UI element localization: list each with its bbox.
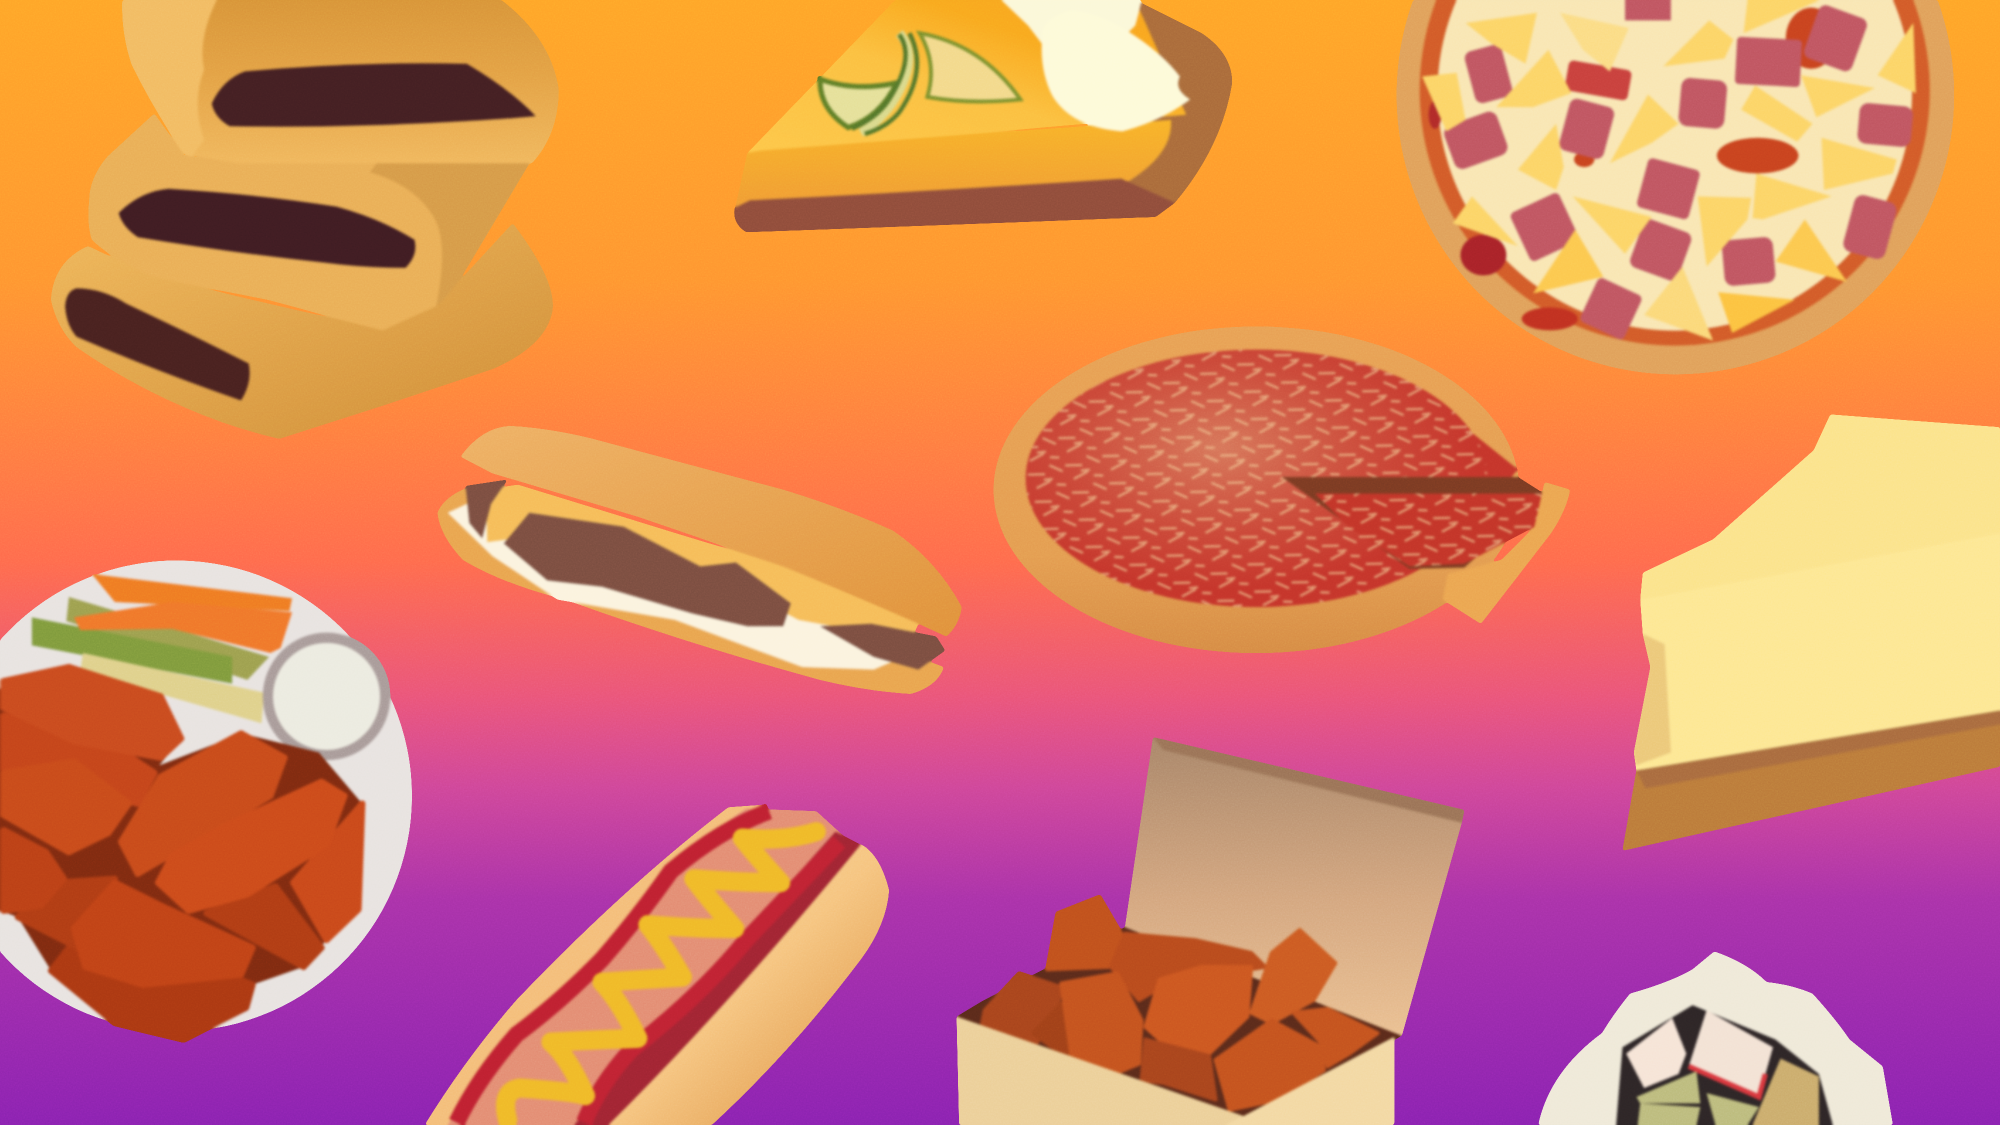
pizza cheese (1438, 0, 1912, 331)
food: cheesesteak sandwich (438, 426, 962, 694)
food: buffalo wings plate (0, 561, 412, 1040)
rice ring (1538, 952, 1893, 1125)
dip ramekin (263, 633, 390, 760)
cake top (1640, 415, 2000, 599)
pie crust edge (1110, 0, 1232, 217)
sauce spots (1429, 8, 1837, 330)
sausage (448, 809, 844, 1125)
onions (448, 504, 918, 670)
cucumber (1636, 1071, 1759, 1125)
food: chicago deep dish pizza (994, 327, 1570, 653)
food: sushi roll (1538, 952, 1893, 1125)
plate (0, 561, 412, 1031)
crab stick (1626, 1010, 1773, 1097)
food: key lime pie slice (734, 0, 1232, 232)
fig bar middle (88, 114, 529, 330)
pineapple pieces (1422, 0, 1916, 341)
celery sticks (32, 597, 269, 723)
sauce surface (1026, 349, 1487, 607)
pie top surface (747, 0, 1186, 153)
parmesan haze (1026, 349, 1487, 607)
mustard (506, 832, 816, 1120)
box lid (1125, 737, 1464, 1036)
box front (957, 1017, 1394, 1125)
box lid fold (1153, 737, 1464, 823)
cake left shade (1634, 634, 1671, 765)
ham pieces (1442, 0, 1914, 341)
food: cheesecake slice (1622, 415, 2000, 851)
steak (466, 480, 945, 670)
back right sauce ledge (1365, 408, 1518, 490)
chicken wings (4, 667, 362, 1040)
avocado (1753, 1059, 1819, 1125)
deep dish crust body (994, 327, 1519, 653)
bun gap shadow (574, 832, 867, 1125)
near bun (608, 844, 889, 1125)
gap shadow (1282, 477, 1546, 569)
pie crust base (734, 179, 1175, 232)
melted cheese (486, 485, 918, 640)
box interior (957, 927, 1402, 1122)
cheese shreds (1026, 349, 1487, 607)
fig bar bottom (51, 223, 553, 439)
lime slices (820, 33, 1020, 134)
boneless wings (981, 897, 1378, 1110)
cake crust (1622, 710, 2000, 851)
crust dark band (1636, 710, 2000, 788)
ketchup (457, 811, 769, 1122)
whipped cream (1001, 0, 1190, 131)
carrot sticks (74, 574, 292, 653)
wing shadow base (0, 676, 362, 1040)
pizza slice (1315, 482, 1570, 624)
box front right (1224, 1037, 1394, 1125)
pizza sauce rim (1420, 0, 1930, 346)
nori (1616, 1005, 1833, 1125)
fig bar top (122, 0, 559, 163)
food: hawaiian pizza (1397, 0, 1954, 374)
top bun (460, 426, 962, 636)
pizza crust (1397, 0, 1954, 374)
bottom bun (438, 489, 944, 694)
food: hot dog (425, 805, 889, 1125)
pie filling side (735, 120, 1171, 210)
food: boneless wings in box (957, 737, 1464, 1125)
far bun (425, 805, 763, 1125)
cake side (1634, 533, 2000, 770)
food: fig bars (51, 0, 559, 439)
